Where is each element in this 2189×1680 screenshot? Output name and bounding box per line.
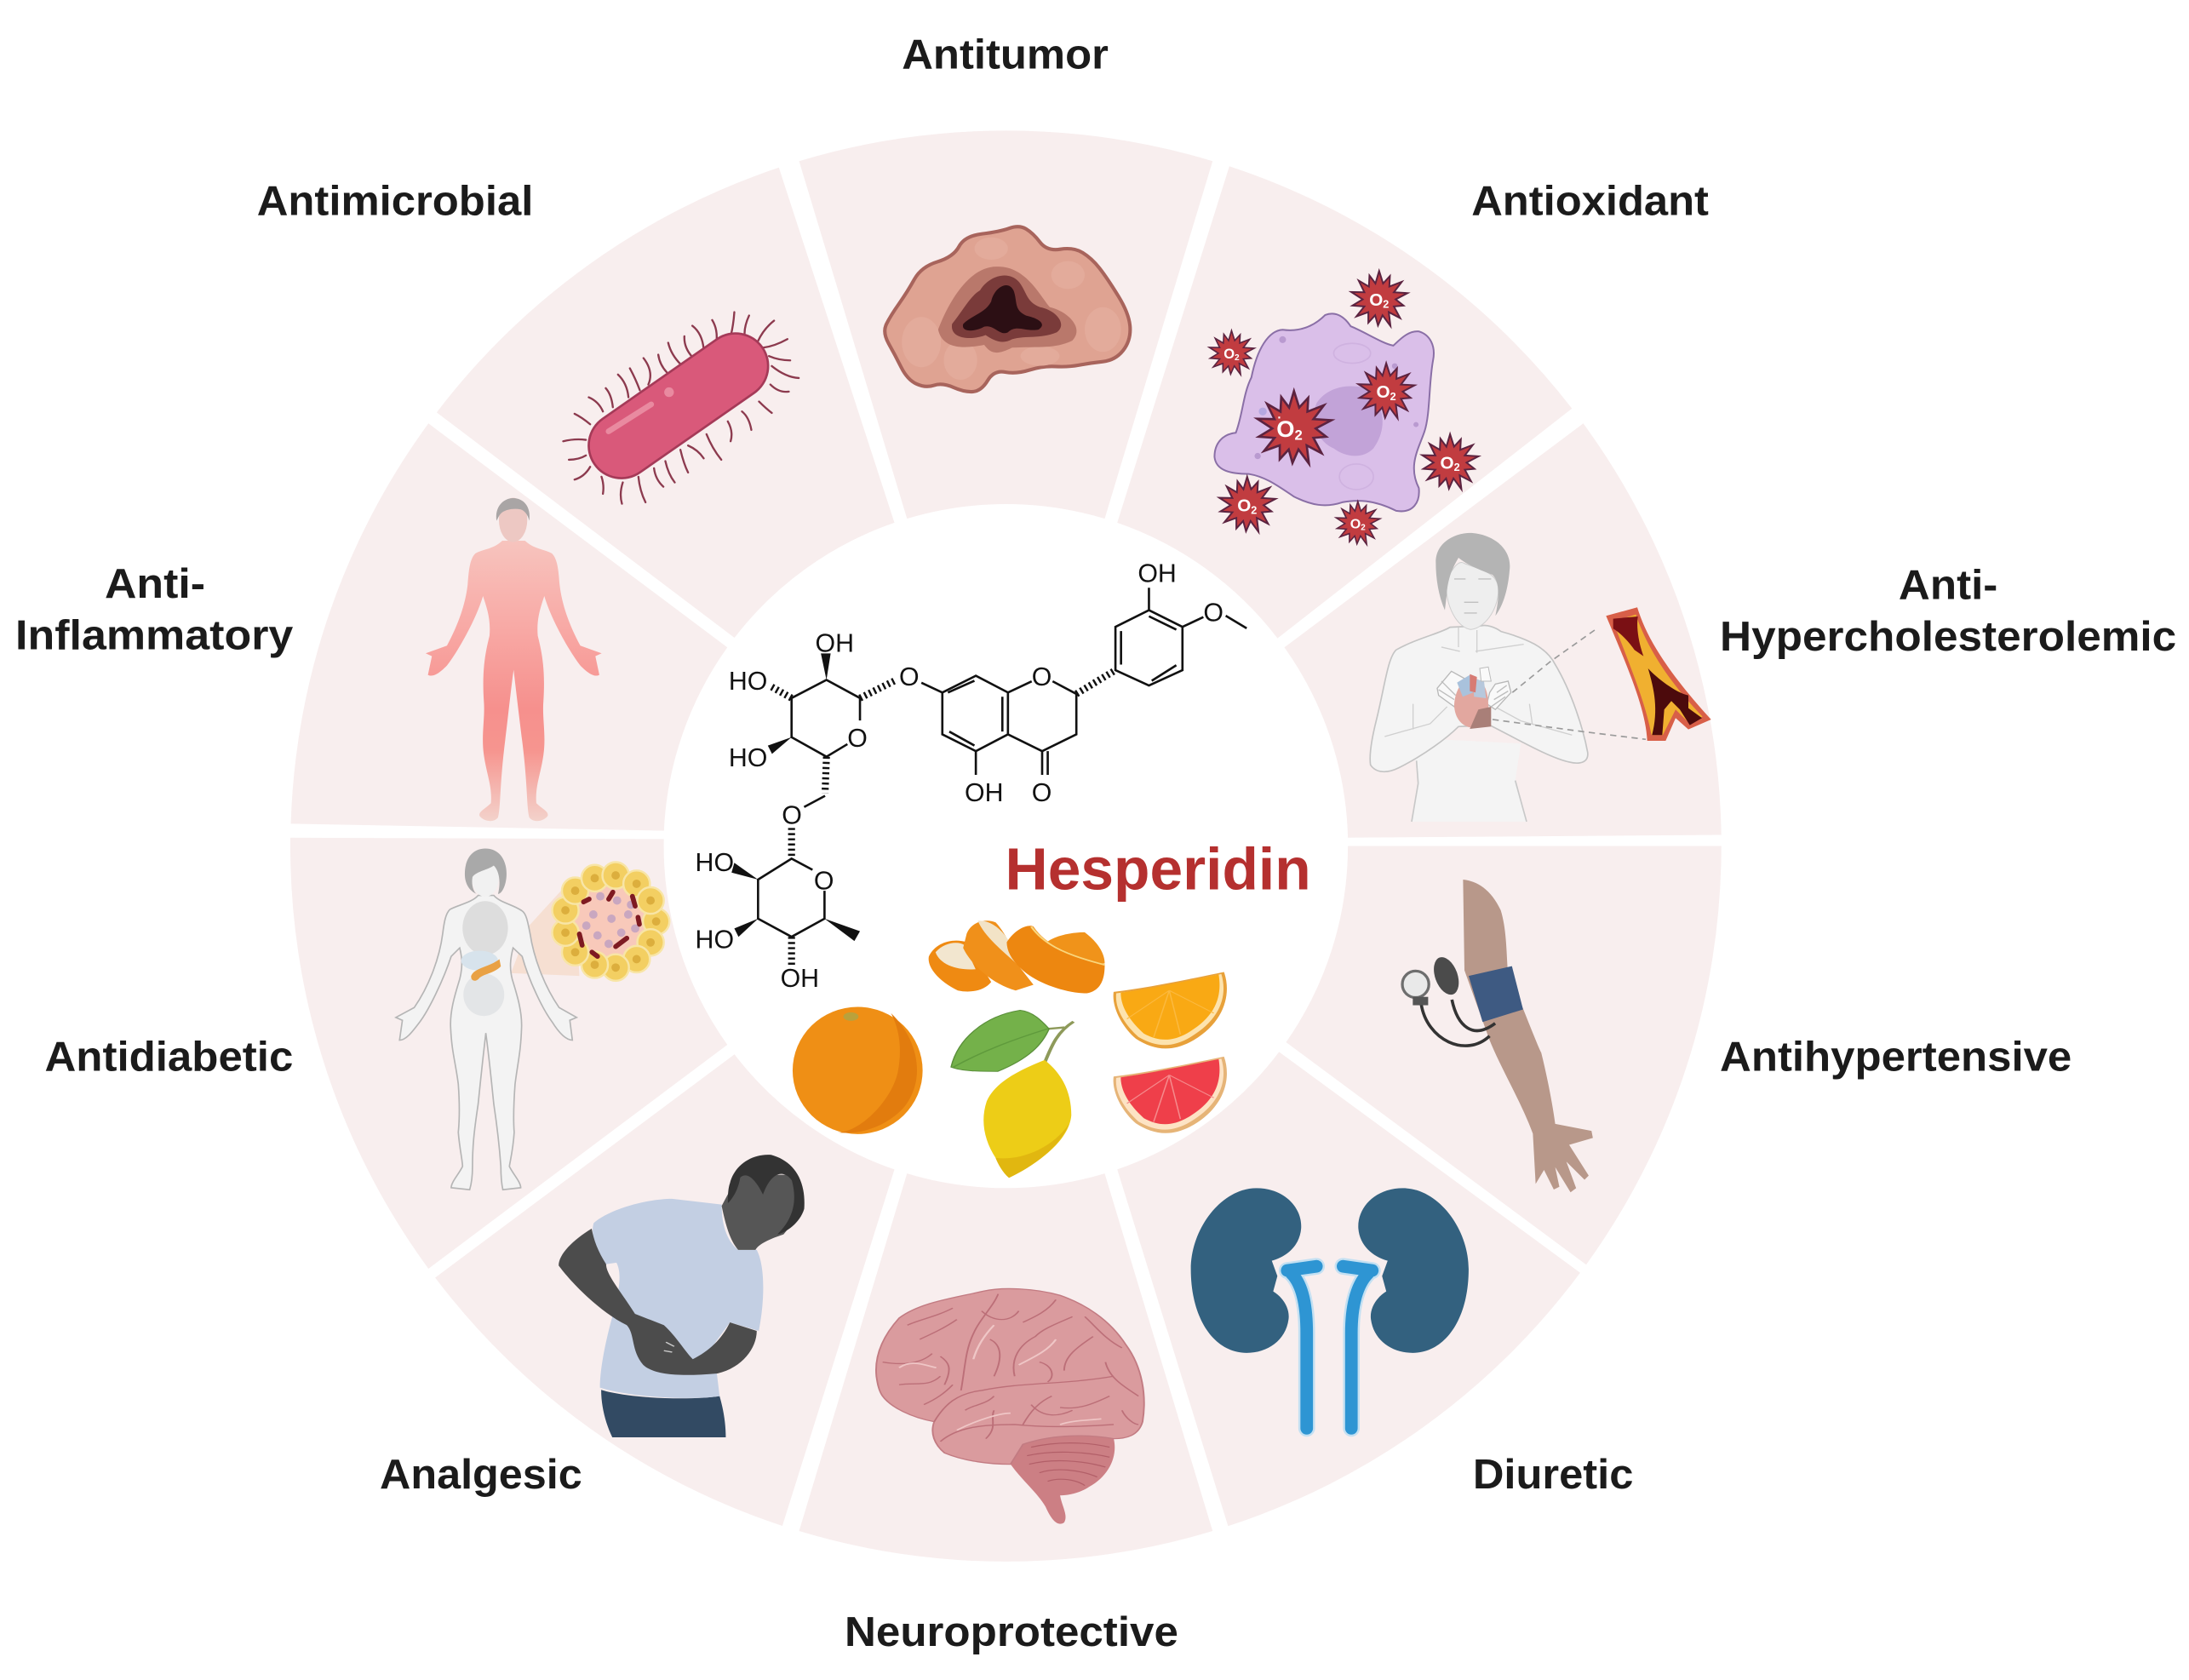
icon: antioxidant cell with radicals — [1209, 271, 1478, 544]
label: Anti-Inflammatory: Anti- — [105, 560, 205, 607]
molecule: hesperidin structure: O — [899, 663, 920, 691]
panel: Antihypertensive segment — [1286, 846, 1722, 1264]
icon: woman with pancreas and islet — [396, 849, 669, 1190]
label: Antihypertensive: Antihypertensive — [1720, 1034, 2072, 1081]
radical: right: 2 — [1454, 462, 1460, 473]
radical: left: O — [1223, 346, 1235, 362]
panel: Antimicrobial segment — [437, 168, 895, 638]
molecule: hesperidin structure: OH — [1137, 560, 1177, 588]
leaf — [951, 1011, 1074, 1071]
panel: Anti-Inflammatory segment — [291, 423, 727, 831]
molecule: hesperidin structure: HO — [729, 744, 767, 772]
radical: bottom — [1336, 502, 1380, 544]
radical: large center-left — [1258, 391, 1332, 464]
label: Antimicrobial: Antimicrobial — [257, 178, 533, 225]
label: Antidiabetic: Antidiabetic — [44, 1034, 293, 1081]
icon: citrus fruits — [793, 920, 1227, 1178]
grapefruit slice — [1114, 1057, 1227, 1133]
molecule: hesperidin structure — [696, 560, 1246, 993]
icon: bacterium — [563, 312, 799, 504]
label: Anti-Inflammatory: Inflammatory — [15, 611, 294, 658]
molecule: hesperidin structure: HO — [696, 926, 734, 954]
label: Antioxidant: Antioxidant — [1471, 178, 1709, 225]
molecule: hesperidin structure: OH — [816, 630, 854, 658]
icon: tumor — [885, 226, 1130, 392]
label: Anti-Inflammatory — [15, 560, 294, 658]
panel: Neuroprotective segment — [799, 1173, 1212, 1562]
panel: Analgesic segment — [435, 1054, 895, 1526]
islet magnification — [552, 862, 669, 981]
molecule: hesperidin structure: O — [1032, 663, 1052, 691]
molecule: hesperidin structure: O — [1203, 599, 1223, 628]
radical: on nucleus: O — [1377, 382, 1390, 402]
panel: Antioxidant segment — [1117, 166, 1572, 639]
molecule: hesperidin structure: O — [782, 801, 802, 829]
label: Anti-Hypercholesterolemic — [1720, 561, 2176, 660]
label: Anti-Hypercholesterolemic: Anti- — [1899, 561, 1997, 608]
icon: kidneys — [1191, 1188, 1469, 1428]
molecule: hesperidin structure: O — [847, 725, 868, 753]
radical: bottom: 2 — [1361, 524, 1366, 533]
lemon — [983, 1060, 1071, 1178]
molecule: hesperidin structure: HO — [696, 849, 734, 877]
orange peel — [929, 920, 1104, 994]
radical: right: O — [1441, 454, 1454, 473]
icon: man in pain — [559, 1155, 805, 1437]
radical: top: 2 — [1383, 299, 1389, 311]
heart — [1454, 679, 1488, 728]
panel: Antidiabetic segment — [290, 838, 727, 1269]
center: molecule and citrus — [665, 506, 1346, 1187]
molecule: hesperidin structure: O — [1032, 779, 1052, 807]
radical: large center-left: O — [1276, 416, 1294, 442]
radical: large center-left: 2 — [1294, 427, 1303, 443]
molecule: hesperidin structure: HO — [729, 668, 767, 696]
radical: bottom: O — [1350, 517, 1361, 532]
label: Anti-Hypercholesterolemic: Hypercholesterolemic — [1720, 613, 2176, 660]
orange slice — [1114, 972, 1227, 1048]
radical: on nucleus — [1358, 364, 1414, 418]
radical: top: O — [1369, 290, 1383, 310]
label: Antitumor: Antitumor — [902, 31, 1109, 77]
molecule: hesperidin structure: OH — [781, 965, 819, 993]
label: Neuroprotective: Neuroprotective — [845, 1608, 1178, 1655]
radical: left: 2 — [1235, 353, 1240, 363]
panel: Diuretic segment — [1117, 1052, 1580, 1526]
molecule: hesperidin structure: O — [814, 867, 834, 895]
icon: brain — [876, 1288, 1144, 1524]
artery — [1606, 607, 1711, 741]
label: Diuretic: Diuretic — [1473, 1451, 1633, 1498]
label: Analgesic: Analgesic — [380, 1451, 582, 1498]
radical: right — [1422, 434, 1478, 490]
radical: top — [1351, 271, 1407, 326]
icon: anti-inflammatory body — [426, 498, 602, 821]
panel: Antitumor segment — [799, 130, 1212, 519]
molecule: hesperidin structure: OH — [965, 779, 1004, 807]
radical: bottom left: 2 — [1251, 504, 1257, 516]
title: Hesperidin: Hesperidin — [1006, 835, 1311, 902]
radical: bottom left: O — [1237, 496, 1251, 516]
icon: arm with blood pressure cuff — [1402, 880, 1593, 1192]
panel: Anti-Hypercholesterolemic segment — [1284, 423, 1722, 838]
whole orange — [793, 1007, 923, 1134]
radical: bottom left — [1219, 477, 1275, 532]
radical: large center-left: · — [1277, 410, 1281, 425]
hands — [1437, 671, 1511, 709]
dashed callout lines — [1493, 630, 1646, 739]
icon: man with heart and clogged artery — [1370, 533, 1711, 822]
radical: on nucleus: 2 — [1390, 391, 1396, 403]
radical: left — [1209, 330, 1254, 375]
